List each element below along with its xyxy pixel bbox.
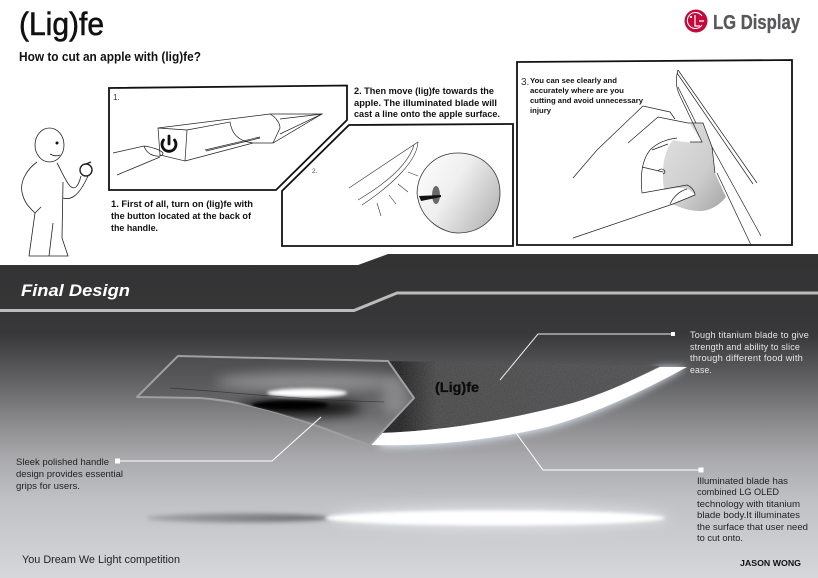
step 3 text: accurately where are you (530, 86, 624, 95)
footer: competition: You Dream We Light competition (22, 554, 180, 566)
icon: power button (162, 136, 176, 151)
titanium blade body (380, 360, 665, 435)
floor reflection (146, 505, 670, 531)
section heading: Final Design: Final Design (21, 281, 130, 300)
callout: illuminated blade: Illuminated blade has (697, 476, 788, 487)
footer: author: JASON WONG (740, 558, 801, 568)
subtitle: How to cut an apple with (lig)fe? (19, 50, 201, 64)
knife logo: (Lig)fe (435, 379, 479, 395)
panel 3: cutting with illumination (517, 60, 792, 245)
step 1 text: the button located at the back of (111, 211, 252, 221)
step 2 text: 2. Then move (lig)fe towards the (354, 86, 494, 96)
step 3 text: cutting and avoid unnecessary (530, 96, 644, 105)
panel 2: blade and apple: 2. (312, 168, 318, 175)
step 3 number: 3. (521, 77, 529, 88)
callout: titanium blade: Tough titanium blade to give (690, 330, 809, 341)
icon: stick figure holding an apple (22, 128, 92, 256)
callout: illuminated blade: technology with titanium (697, 499, 800, 510)
logo: LG Display (684, 10, 801, 34)
step 2 text: cast a line onto the apple surface. (354, 109, 500, 119)
panel 1: turn on the button (109, 86, 347, 190)
callout: handle (16, 417, 321, 492)
step 3 text: You can see clearly and (530, 76, 617, 85)
step 1 text: 1. First of all, turn on (lig)fe with (111, 199, 253, 209)
dark gradient band (0, 254, 818, 578)
callout: handle: Sleek polished handle (16, 457, 109, 468)
illustration: apple with slit (417, 153, 500, 233)
title: (Lig)fe (19, 6, 104, 42)
callout: handle: design provides essential (16, 469, 123, 480)
callout: illuminated blade: the surface that user need (697, 522, 808, 533)
illustration: handle end and thumb (113, 114, 322, 175)
callout: titanium blade: ease. (690, 365, 712, 376)
divider (0, 293, 818, 310)
step 3 text: injury (530, 106, 552, 115)
callout: illuminated blade: blade body.It illuminates (697, 510, 800, 521)
callout: illuminated blade: to cut onto. (697, 533, 743, 544)
polished handle (137, 356, 414, 445)
panel 2: blade and apple (282, 124, 513, 246)
illustration: blade outline and rays (349, 142, 418, 216)
callout: handle: grips for users. (16, 481, 80, 492)
illuminated blade edge (370, 367, 687, 445)
blade glow (380, 367, 687, 447)
callout: illuminated blade (516, 433, 811, 544)
logo: LG Display: LG Display (713, 12, 801, 34)
callout: titanium blade: strength and ability to slice (690, 342, 800, 353)
panel 1: turn on the button: 1. (113, 93, 120, 102)
knife illustration (137, 356, 687, 447)
callout: titanium blade: through different food with (690, 353, 803, 364)
callout: illuminated blade: combined LG OLED (697, 487, 779, 498)
illustration: apple (663, 123, 726, 211)
step 1 text: the handle. (111, 223, 158, 233)
step 2 text: apple. The illuminated blade will (354, 98, 497, 108)
illustration: hand and knife lines (573, 70, 761, 245)
callout: titanium blade (500, 330, 812, 380)
